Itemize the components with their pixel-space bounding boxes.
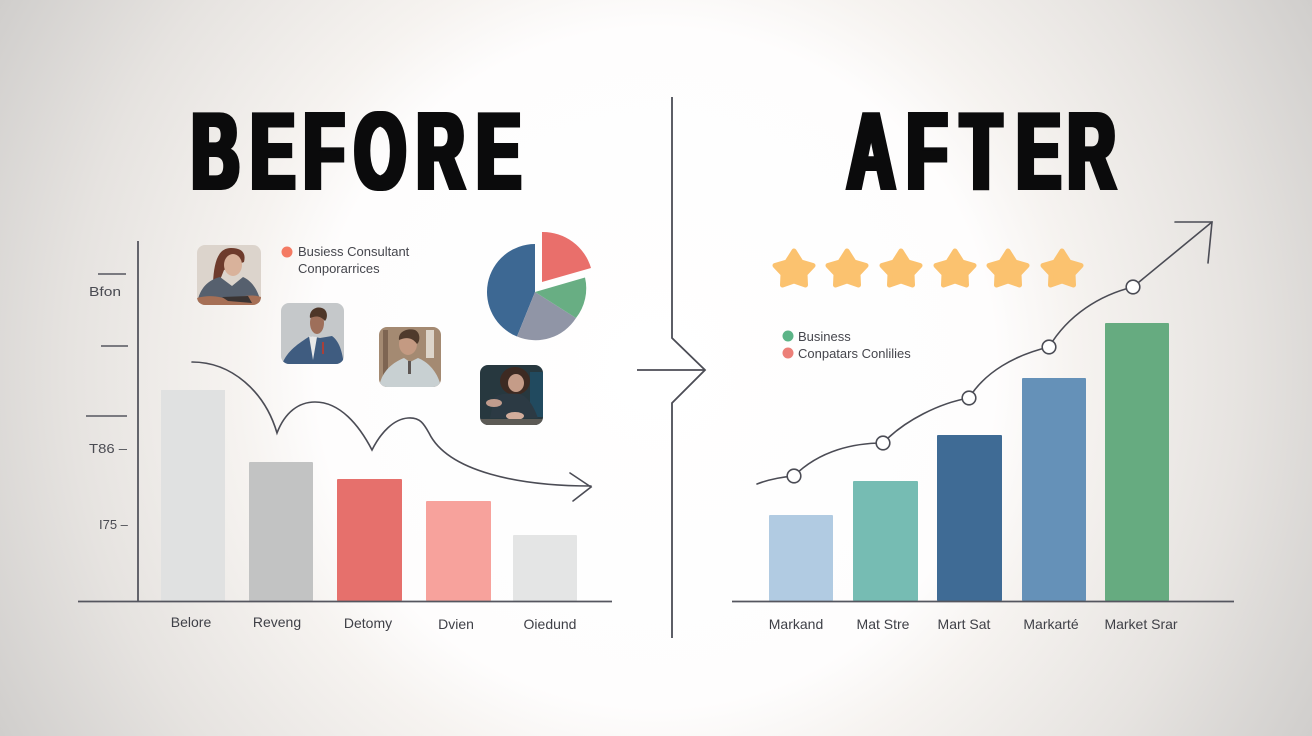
before bar labels: Oiedund [524, 616, 576, 632]
before bar labels: Detomy [344, 615, 392, 631]
y axis with ticks and labels: Bfon [89, 284, 121, 299]
data points [787, 280, 1140, 483]
legend: before: Busiess Consultant [298, 244, 410, 259]
declining trend arrow [192, 362, 591, 501]
baseline [732, 600, 1234, 602]
y axis with ticks and labels: T86 – [89, 441, 128, 456]
title: AFTER: AFTER [848, 91, 1115, 213]
before bar labels: Belore [171, 614, 211, 630]
after bars [769, 323, 1169, 601]
before bar labels: Reveng [253, 614, 301, 630]
portrait 4 [480, 365, 543, 425]
after bar labels [769, 616, 1178, 632]
after chart [732, 222, 1234, 632]
star rating [775, 251, 1081, 285]
portrait 1 [197, 245, 261, 305]
legend: before: Conporarrices [298, 261, 380, 276]
after bar labels: Markand [769, 616, 823, 632]
before bars [161, 390, 577, 601]
after bar labels: Markarté [1023, 616, 1079, 632]
portrait 3 [379, 327, 441, 387]
baseline [78, 600, 612, 602]
legend: after: Business [798, 329, 851, 344]
before chart [78, 241, 612, 632]
before bar labels: Dvien [438, 616, 474, 632]
y axis with ticks and labels [86, 241, 138, 601]
after bar labels: Mat Stre [857, 616, 910, 632]
after bar labels: Mart Sat [938, 616, 991, 632]
portrait 2 [281, 303, 344, 364]
y axis with ticks and labels: I75 – [99, 517, 129, 532]
pie chart [487, 232, 591, 340]
rising trend arrow [757, 222, 1212, 484]
legend: after [782, 329, 911, 361]
legend: after: Conpatars Conlilies [798, 346, 911, 361]
title: BEFORE: BEFORE [192, 91, 521, 213]
before bar labels [171, 614, 576, 632]
central divider with arrow [637, 97, 705, 638]
legend: before [282, 244, 410, 276]
after bar labels: Market Srar [1104, 616, 1178, 632]
